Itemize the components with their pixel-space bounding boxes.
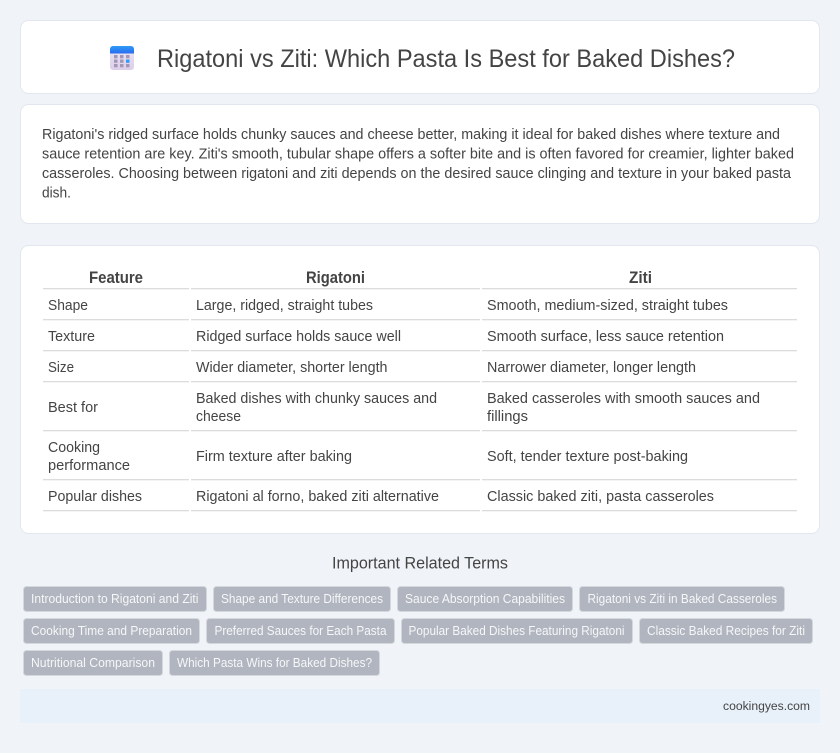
- table header row: Ziti: [629, 269, 652, 287]
- table row: best for: Best for: [48, 400, 98, 416]
- panel: summary paragraph: dish.: [42, 186, 71, 202]
- tag: Rigatoni vs Ziti in Baked Casseroles: [588, 592, 777, 606]
- table row: cooking performance: Soft, tender texture post-baking: [487, 449, 688, 465]
- tag: Nutritional Comparison: [31, 656, 155, 670]
- footer: cookingyes.com: [723, 699, 810, 713]
- table row: popular dishes: Classic baked ziti, pasta casseroles: [487, 489, 714, 505]
- table row: cooking performance: [43, 440, 797, 480]
- table row: best for: Baked dishes with chunky sauces and: [196, 391, 437, 407]
- table row: size: [43, 360, 797, 382]
- tag: Shape and Texture Differences: [221, 592, 383, 606]
- table row: texture: [43, 329, 797, 351]
- tag: Sauce Absorption Capabilities: [405, 592, 565, 606]
- table header row: [43, 269, 797, 289]
- tag: [640, 618, 812, 644]
- panel: summary paragraph: [20, 104, 820, 224]
- table row: cooking performance: Cooking: [48, 440, 100, 456]
- footer: [20, 689, 820, 723]
- tag: [402, 618, 632, 644]
- table row: size: Wider diameter, shorter length: [196, 360, 388, 376]
- table row: best for: Baked casseroles with smooth sauces and: [487, 391, 760, 407]
- heading: related terms: Important Related Terms: [332, 554, 508, 572]
- table row: best for: [43, 391, 797, 431]
- tag: Which Pasta Wins for Baked Dishes?: [177, 656, 372, 670]
- table header row: Feature: [89, 269, 143, 287]
- tag: Classic Baked Recipes for Ziti: [647, 624, 805, 638]
- tag: Popular Baked Dishes Featuring Rigatoni: [408, 624, 624, 638]
- table row: popular dishes: [43, 489, 797, 511]
- table row: cooking performance: performance: [48, 458, 130, 474]
- table row: shape: Large, ridged, straight tubes: [196, 298, 373, 314]
- tag: Preferred Sauces for Each Pasta: [214, 624, 386, 638]
- tag: [24, 586, 206, 612]
- tag: Introduction to Rigatoni and Ziti: [31, 592, 198, 606]
- table row: texture: Ridged surface holds sauce well: [196, 329, 401, 345]
- table row: best for: fillings: [487, 409, 528, 425]
- tag: [214, 586, 390, 612]
- title text: Rigatoni vs Ziti: Which Pasta Is Best for Baked Dishes?: [157, 45, 735, 73]
- tag: [580, 586, 784, 612]
- table row: size: Narrower diameter, longer length: [487, 360, 696, 376]
- table row: size: Size: [48, 360, 74, 376]
- table row: texture: Smooth surface, less sauce retention: [487, 329, 724, 345]
- panel: title: [20, 20, 820, 94]
- tags: related terms: [24, 586, 812, 676]
- tag: [24, 650, 162, 676]
- table header row: Rigatoni: [306, 269, 365, 287]
- table row: texture: Texture: [48, 329, 95, 345]
- panel: summary paragraph: sauce retention are key. Ziti's smooth, tubular shape offers a softer bite and is often favored for creamier, lighter baked: [42, 146, 794, 162]
- table row: shape: [43, 298, 797, 320]
- table row: popular dishes: Popular dishes: [48, 489, 142, 505]
- panel: summary paragraph: Rigatoni's ridged surface holds chunky sauces and cheese better, making it ideal for baked dishes where texture and: [42, 127, 780, 143]
- table row: shape: Shape: [48, 298, 88, 314]
- icon: calendar: [110, 46, 134, 70]
- tag: [170, 650, 380, 676]
- table row: cooking performance: Firm texture after baking: [196, 449, 352, 465]
- tag: [24, 618, 200, 644]
- tag: [398, 586, 572, 612]
- panel: comparison table: [20, 246, 820, 534]
- panel: summary paragraph: casseroles. Choosing between rigatoni and ziti depends on the desired sauce clinging and texture in your baked pasta: [42, 166, 792, 182]
- table row: popular dishes: Rigatoni al forno, baked ziti alternative: [196, 489, 439, 505]
- table row: best for: cheese: [196, 409, 241, 425]
- tag: [206, 618, 394, 644]
- tag: Cooking Time and Preparation: [31, 624, 192, 638]
- table row: shape: Smooth, medium-sized, straight tubes: [487, 298, 728, 314]
